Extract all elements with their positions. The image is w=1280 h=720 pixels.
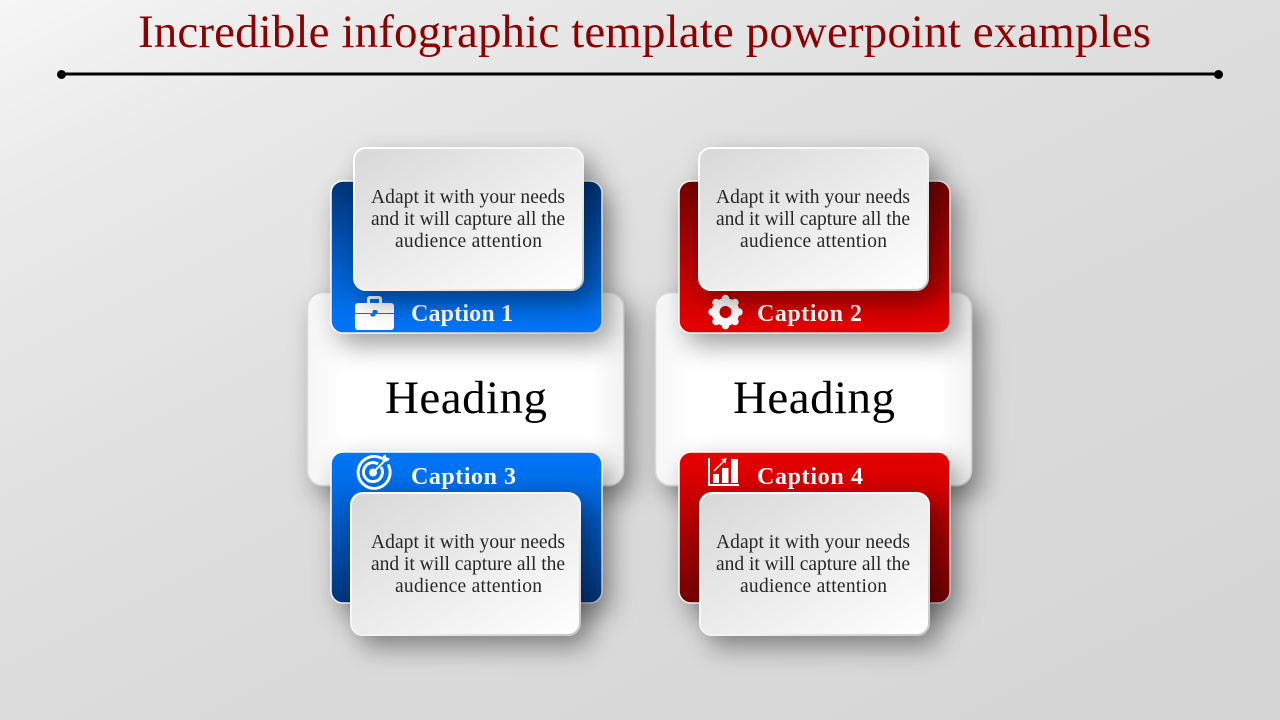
caption panel 4 xyxy=(679,452,950,603)
text card 2: audience attention xyxy=(740,231,887,252)
caption panel 3 xyxy=(331,452,602,603)
panel: left group xyxy=(308,148,624,635)
text card 4: audience attention xyxy=(740,576,887,597)
heading card left: Heading xyxy=(385,372,547,424)
text card 3 xyxy=(351,493,580,635)
text card 1: audience attention xyxy=(395,231,542,252)
text card 4: Adapt it with your needs xyxy=(716,532,910,553)
icon: bar chart with arrow xyxy=(708,458,739,486)
caption 3 label: Caption 3 xyxy=(411,464,516,490)
heading card left xyxy=(308,292,624,486)
title: Incredible infographic template powerpoint examples xyxy=(138,6,1151,58)
icon: target xyxy=(358,454,390,488)
text card 2 xyxy=(699,148,928,290)
title divider with end dots xyxy=(57,70,1223,79)
heading card right: Heading xyxy=(733,372,895,424)
text card 1 xyxy=(354,148,583,290)
icon: gear xyxy=(712,298,740,326)
text card 3: audience attention xyxy=(395,576,542,597)
caption 1 label: Caption 1 xyxy=(411,301,513,327)
caption panel 1 xyxy=(331,181,602,333)
caption 4 label: Caption 4 xyxy=(757,464,863,490)
caption panel 2 xyxy=(679,181,950,333)
text card 4 xyxy=(700,493,929,635)
text card 1: and it will capture all the xyxy=(371,209,565,230)
icon: briefcase xyxy=(355,296,394,330)
caption 2 label: Caption 2 xyxy=(757,301,862,327)
text card 2: and it will capture all the xyxy=(716,209,910,230)
panel: right group xyxy=(656,148,972,635)
text card 1: Adapt it with your needs xyxy=(371,187,565,208)
text card 3: and it will capture all the xyxy=(371,554,565,575)
text card 4: and it will capture all the xyxy=(716,554,910,575)
text card 3: Adapt it with your needs xyxy=(371,532,565,553)
text card 2: Adapt it with your needs xyxy=(716,187,910,208)
heading card right xyxy=(656,292,972,486)
